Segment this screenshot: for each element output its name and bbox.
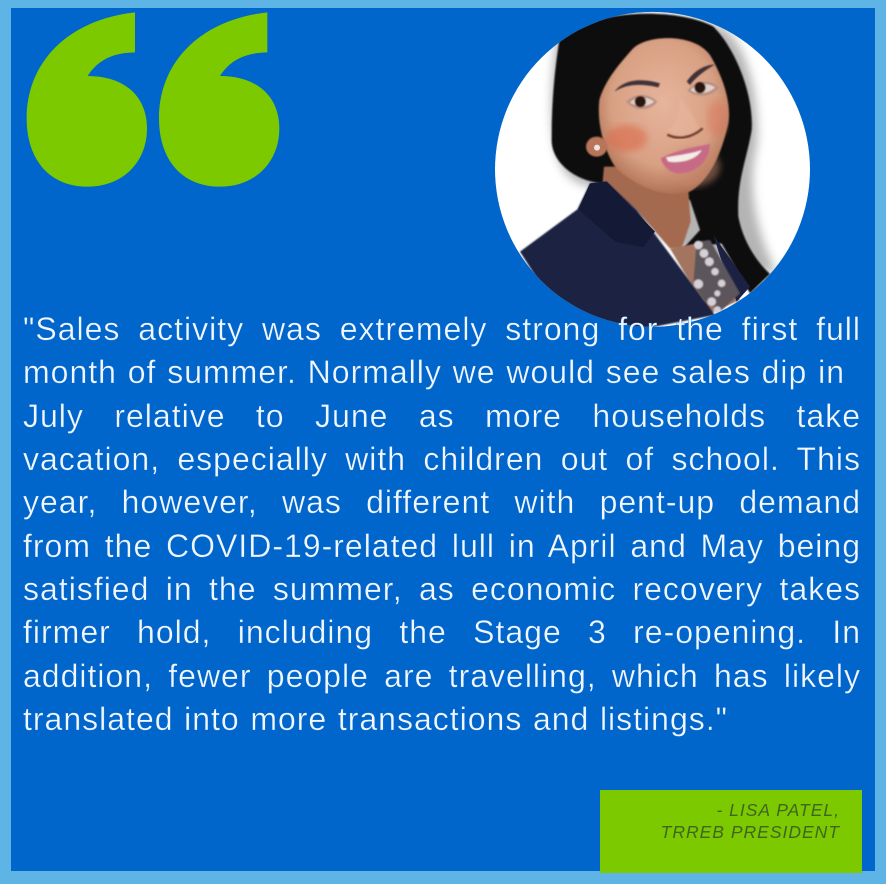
quote text: addition, fewer people are travelling, which has likely (23, 658, 861, 694)
quote text: firmer hold, including the Stage 3 re-opening. In (23, 614, 861, 650)
quote text: year, however, was different with pent-up demand (23, 484, 861, 520)
hair (552, 14, 770, 293)
quote text: satisfied in the summer, as economic recovery takes (23, 571, 861, 607)
attribution badge (600, 790, 862, 873)
necklace (693, 240, 740, 314)
attribution text (661, 800, 840, 842)
quote text: from the COVID-19-related lull in April and May being (23, 528, 861, 564)
quote text: translated into more transactions and listings." (23, 701, 728, 737)
mouth (661, 144, 710, 173)
attribution text: TRREB PRESIDENT (661, 822, 840, 842)
hair shadow (552, 14, 777, 273)
quote text (23, 311, 861, 737)
face (599, 38, 729, 194)
ear (586, 137, 607, 157)
portrait photo illustration (495, 12, 810, 327)
jacket (520, 182, 715, 333)
quote text: month of summer. Normally we would see sales dip in (23, 354, 845, 390)
attribution text: - LISA PATEL, (716, 800, 840, 820)
blush (606, 125, 647, 152)
quote text: vacation, especially with children out of school. This (23, 441, 861, 477)
quote text: "Sales activity was extremely strong for the first full (23, 311, 861, 347)
eyes (626, 82, 719, 109)
eyebrows (614, 64, 715, 92)
nose (674, 116, 698, 135)
neck (603, 167, 691, 248)
quote text: July relative to June as more households take (23, 398, 861, 434)
chest (670, 243, 740, 313)
